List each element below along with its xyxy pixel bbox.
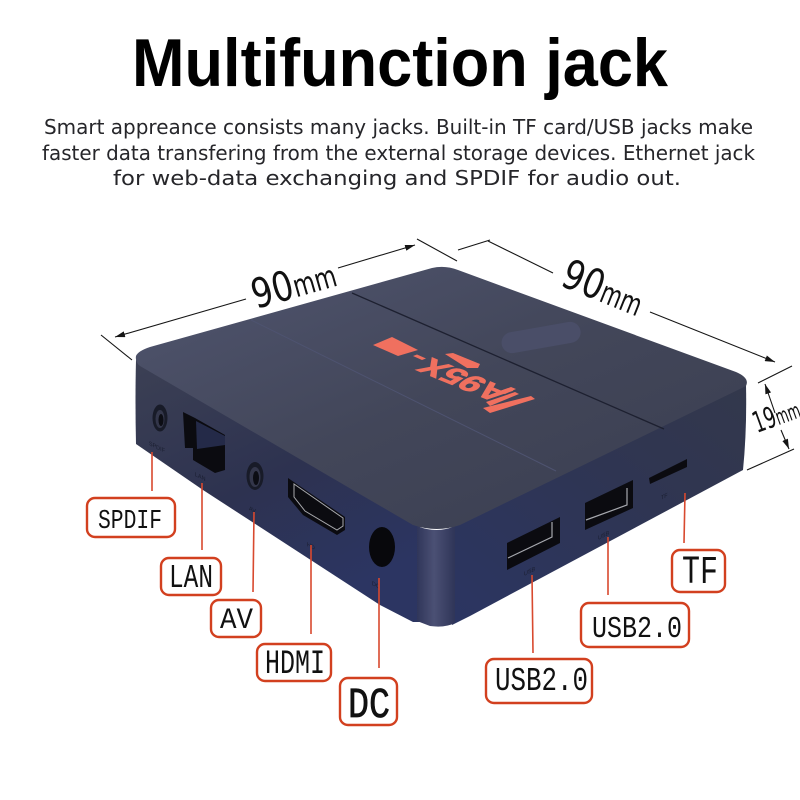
- DC port: [369, 527, 395, 591]
- label 19mm: 19: [748, 400, 781, 440]
- left line: [488, 241, 553, 273]
- logo dash: [413, 354, 426, 360]
- label: AV: [211, 600, 261, 638]
- USB port upper: [585, 480, 633, 542]
- logo small badge: [445, 353, 480, 368]
- label 90mm: [555, 250, 651, 326]
- label: USB2.0 lower: [486, 659, 592, 703]
- label: USB2.0 upper: USB2.0: [592, 612, 682, 647]
- label 90mm: [246, 249, 341, 319]
- label 90mm: 90: [555, 250, 612, 310]
- LAN port: [183, 412, 225, 483]
- description text: Smart appreance consists many jacks. Built-in TF card/USB jacks make: [44, 115, 753, 139]
- box top surface: [136, 267, 747, 529]
- LAN port: LAN: [195, 472, 205, 483]
- faint panel seam: [251, 320, 556, 471]
- SPDIF port: SPDIF: [149, 441, 165, 455]
- label: LAN: LAN: [169, 560, 213, 597]
- extension lines: [101, 239, 457, 360]
- arrow down: [781, 430, 789, 449]
- power button: [500, 320, 582, 355]
- label: HDMI: HDMI: [265, 646, 325, 684]
- TF slot: [649, 459, 687, 502]
- logo equalizer bars: [483, 387, 535, 413]
- logo: [373, 337, 535, 413]
- label: SPDIF: SPDIF: [98, 507, 162, 537]
- dimension: top left width: [101, 239, 457, 360]
- title: Multifunction jack: [132, 25, 668, 101]
- TF slot: TF: [661, 493, 668, 502]
- label 90mm: 90: [246, 261, 299, 319]
- label 90mm: mm: [289, 258, 341, 305]
- HDMI port: [288, 478, 345, 552]
- AV port: AV: [249, 506, 256, 515]
- description text: for web-data exchanging and SPDIF for audio out.: [113, 166, 681, 190]
- box front corner: [417, 526, 455, 627]
- TV box device: [136, 267, 747, 627]
- logo W badge: [373, 337, 418, 356]
- HDMI port: HD: [307, 542, 315, 552]
- label: SPDIF: [87, 498, 175, 537]
- left arrow: [115, 299, 246, 337]
- label: DC: DC: [348, 681, 390, 730]
- description text: [42, 115, 755, 190]
- USB port upper: USB: [598, 530, 609, 542]
- label 90mm: mm: [595, 275, 647, 324]
- USB port lower: [507, 517, 560, 578]
- label: USB2.0 lower: USB2.0: [495, 663, 588, 700]
- label: USB2.0 upper: [581, 603, 689, 647]
- USB port lower: USB: [524, 566, 535, 578]
- lid seam: [352, 293, 664, 429]
- SPDIF port: [149, 404, 168, 455]
- leader lines: [152, 452, 685, 668]
- AV port: [246, 462, 264, 515]
- label: TF: TF: [682, 551, 718, 596]
- extension line: [458, 240, 490, 250]
- right arrow: [338, 245, 415, 268]
- dimension: top right depth: [458, 240, 775, 362]
- arrow up: [765, 384, 775, 413]
- box right face: [452, 385, 746, 625]
- label: AV: AV: [220, 604, 253, 638]
- dimension: height: [747, 366, 800, 470]
- description text: faster data transfering from the external storage devices. Ethernet jack: [42, 141, 755, 165]
- extension lines: [747, 366, 794, 470]
- logo text: A95X: [409, 353, 519, 406]
- box left face: [136, 360, 420, 622]
- DC port: DC: [372, 581, 380, 591]
- right arrow: [650, 312, 775, 362]
